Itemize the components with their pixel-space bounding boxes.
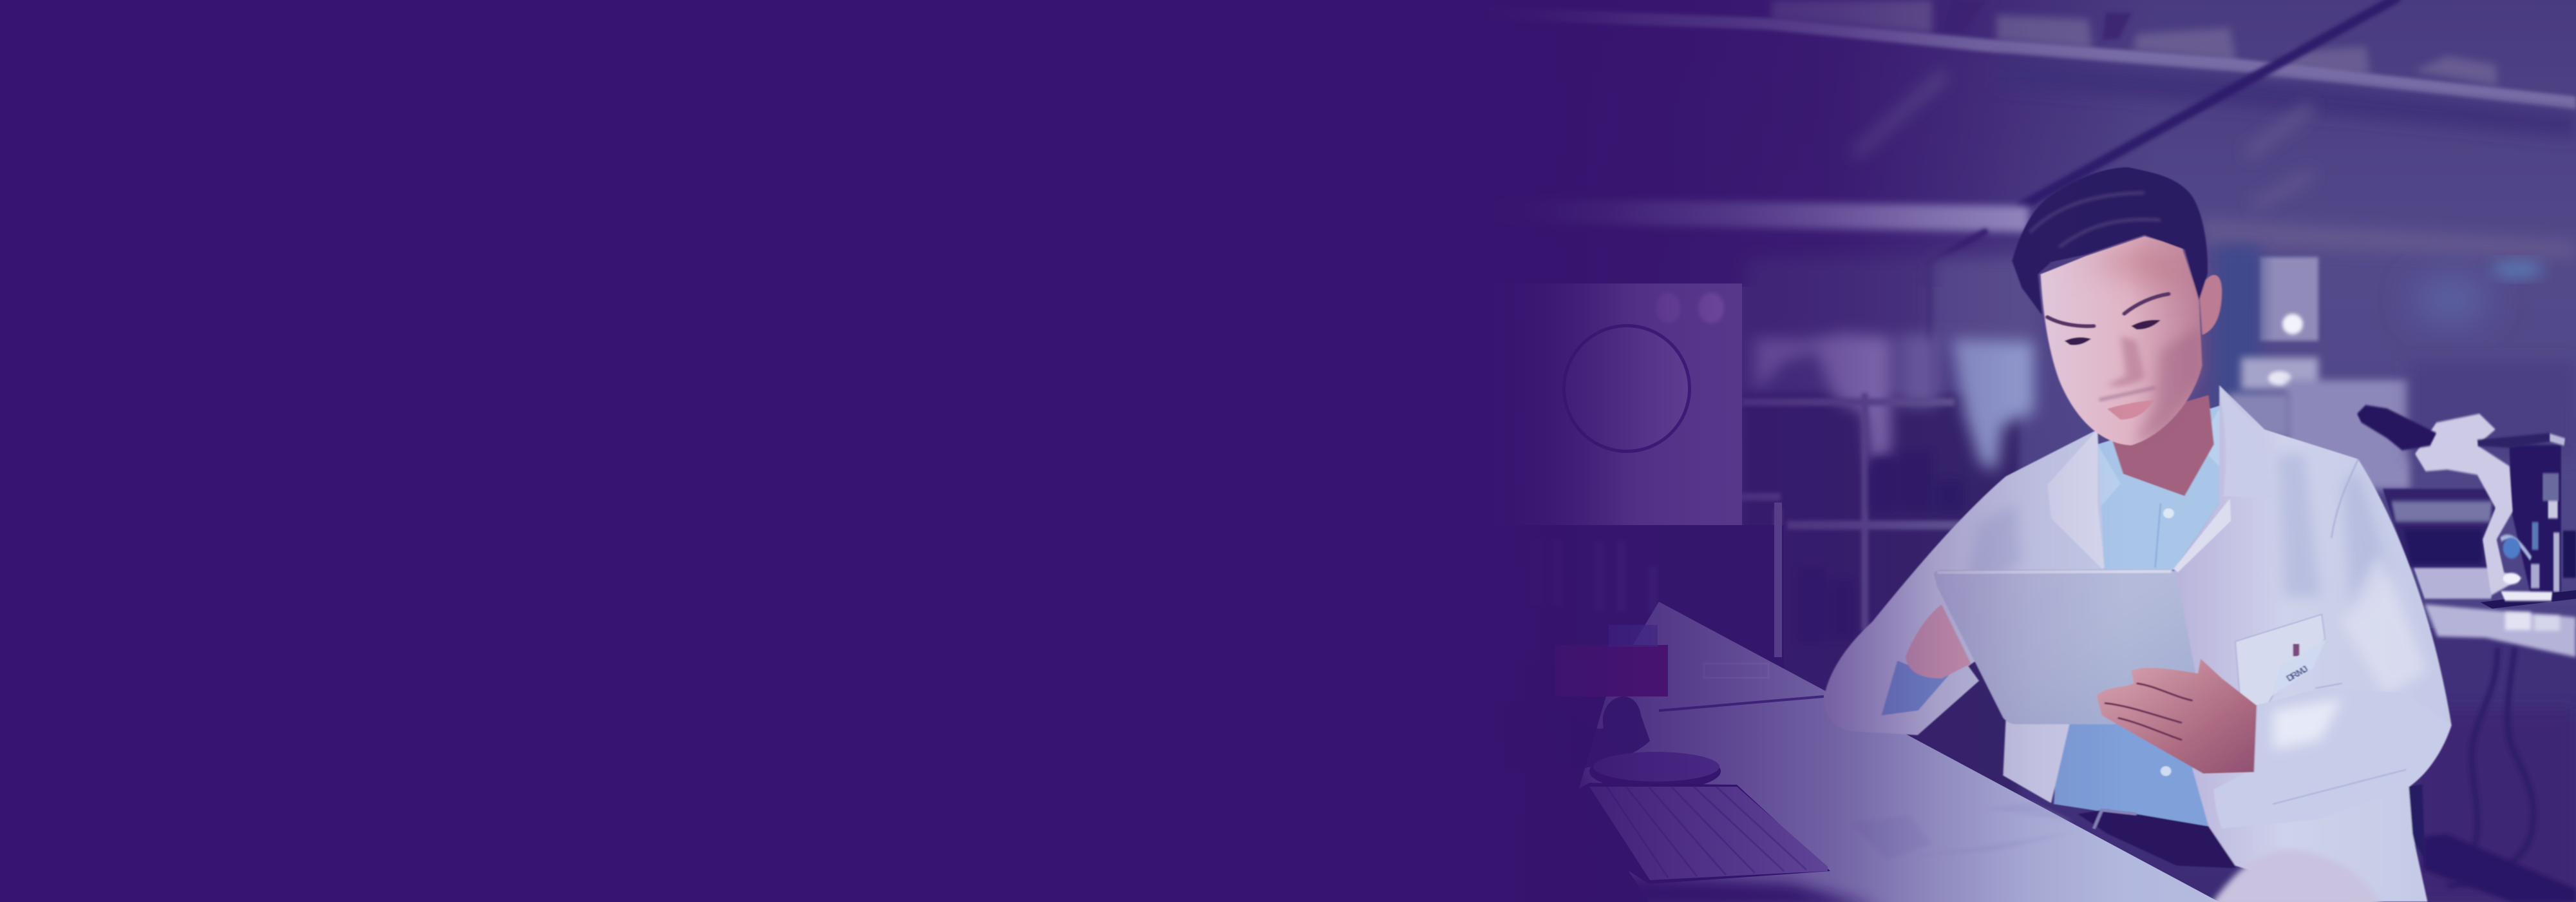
eyepieces (2357, 405, 2436, 450)
column parts (2531, 473, 2559, 592)
left sleeve (1824, 430, 2105, 735)
cables (2447, 648, 2533, 886)
counter top (2425, 604, 2576, 657)
stubble (2099, 388, 2155, 400)
keyboard (1578, 783, 1830, 884)
pocket (2235, 615, 2325, 705)
hair highlight (2030, 193, 2161, 247)
shadow on bench below keyboard (1571, 760, 1880, 902)
blue wall glow (2492, 260, 2543, 278)
ceiling streaks (1855, 74, 2312, 206)
left cuff (1881, 660, 1955, 715)
diagonal dark rail (2019, 0, 2399, 207)
bench seam (1659, 696, 1824, 711)
counter reflections (2505, 612, 2560, 631)
glass slide (1704, 664, 1768, 678)
lab room: wall and ceiling (1352, 0, 2576, 902)
area under counter (2415, 628, 2576, 902)
shelves dark block (1742, 393, 2019, 805)
horizontal light beam (1481, 198, 2029, 232)
chair edge (2403, 784, 2425, 858)
bench left dark zone (1449, 664, 1655, 902)
sleeve forearm (2214, 688, 2452, 829)
coat left front panel (2003, 720, 2070, 803)
belt (2078, 809, 2237, 868)
shelving in the background (1739, 334, 2034, 805)
bench top (1578, 602, 2219, 902)
face shadow (2134, 326, 2201, 445)
name badge (2271, 639, 2326, 696)
shirt collar (2098, 405, 2226, 508)
microscope (2357, 405, 2576, 609)
blurred foreground arm (2209, 849, 2382, 902)
stage stripes (2391, 501, 2492, 564)
ceiling beam (1481, 6, 2576, 110)
porthole (1562, 324, 1691, 453)
coat back and sleeve (2174, 385, 2452, 902)
cabinet indicator dots (1656, 293, 1724, 323)
microscope base (2414, 568, 2494, 599)
sleeve fold (2273, 684, 2406, 804)
blue tube (2501, 537, 2531, 559)
hair (2012, 168, 2208, 315)
shelf boards and posts (1739, 393, 2006, 651)
black box right (2563, 531, 2576, 578)
ear (2199, 275, 2222, 335)
lower cabinet shelf (1449, 525, 1784, 670)
right wall lights (2215, 245, 2576, 490)
coat shoulder seam (2331, 459, 2358, 538)
paper sheets on bench (1850, 802, 2080, 860)
far wall beam (2202, 219, 2576, 258)
scientist (1824, 168, 2452, 902)
forehead shade (2070, 240, 2193, 291)
coat lapel (2174, 499, 2231, 572)
eyes (2065, 320, 2161, 345)
ceiling panels (1772, 0, 2497, 86)
microscope body (2415, 414, 2523, 595)
glass partition post (1928, 231, 1987, 412)
shirt placket and button (2155, 503, 2161, 568)
left hand (1906, 604, 1971, 678)
name badge: DR. M.J (2285, 664, 2310, 684)
cable and bag (1494, 696, 1650, 771)
eyebrows (2047, 294, 2168, 326)
bottles (1797, 451, 1964, 644)
arm tip (2550, 433, 2565, 446)
finger lines (2105, 684, 2193, 740)
blue rack (1609, 625, 1658, 647)
shirt torso (2054, 405, 2226, 826)
coat collar right (2219, 385, 2271, 499)
mouse (1589, 752, 1721, 791)
darker cabinet behind microscope (2409, 361, 2576, 457)
coat collar left (2047, 430, 2105, 568)
washing cabinet panel (1449, 283, 1784, 670)
red box (1555, 645, 1668, 696)
black base plate (2481, 590, 2576, 609)
dark ceiling shade at left (1352, 0, 2190, 287)
right hand (2096, 658, 2257, 774)
cabinet body (1449, 283, 1742, 528)
test tubes (1530, 541, 1658, 612)
dark column (2510, 445, 2561, 595)
microscope arm (2477, 433, 2565, 448)
lab bench (1449, 602, 2219, 902)
ceiling dark band under the beam (1996, 58, 2576, 139)
lips (2107, 400, 2154, 419)
tablet (1934, 569, 2197, 724)
white equipment box (2287, 380, 2410, 490)
ceiling dark slats (1942, 0, 2132, 40)
right counter and floor (2415, 604, 2576, 902)
coat shadows (1963, 454, 2390, 622)
upper wall band behind shelves (1745, 258, 1929, 335)
stool base (2423, 834, 2576, 902)
lamp reflection (2268, 371, 2291, 385)
pen in pocket (2293, 644, 2299, 657)
nose shadow (2107, 336, 2145, 387)
light strip (2501, 591, 2552, 601)
stage (2383, 489, 2497, 568)
belt buckle (2094, 810, 2137, 829)
face (2040, 236, 2202, 445)
neck (2107, 395, 2214, 496)
ceiling lamp spot (2282, 314, 2303, 334)
blurred bright objects (1755, 334, 2034, 470)
